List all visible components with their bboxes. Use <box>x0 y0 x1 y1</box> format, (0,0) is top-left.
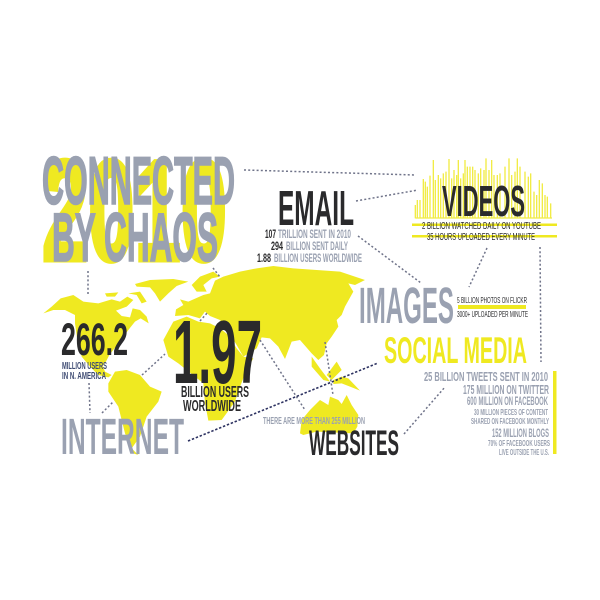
social media side bar <box>553 371 556 454</box>
worldwide caption <box>181 384 249 415</box>
social media stats: LIVE OUTSIDE THE U.S. <box>499 447 549 457</box>
email stats <box>257 229 362 265</box>
email stats: BILLION SENT DAILY <box>286 241 348 253</box>
Eurasia <box>175 266 365 360</box>
navy connector line <box>188 363 378 441</box>
title <box>42 143 235 276</box>
north america number: 266.2 <box>61 314 128 365</box>
dotted connector lines <box>88 170 541 434</box>
email stats: BILLION USERS WORLDWIDE <box>274 253 362 265</box>
yellow rule two <box>412 235 557 238</box>
images rule <box>458 305 526 309</box>
websites caption: THERE ARE MORE THAN 255 MILLION <box>263 416 365 427</box>
Arctic islands <box>105 292 147 303</box>
yellow rule one <box>412 224 557 226</box>
worldwide caption: BILLION USERS <box>181 384 249 401</box>
worldwide caption: WORLDWIDE <box>183 398 241 415</box>
Scandinavia <box>192 272 220 292</box>
text: INTERNET <box>61 408 184 465</box>
text: IMAGES <box>359 277 454 334</box>
north america caption <box>62 360 107 382</box>
text: WEBSITES <box>309 424 399 463</box>
title: BY CHAOS <box>52 199 218 276</box>
worldwide number: 1.97 <box>173 303 262 403</box>
Sumatra <box>312 357 330 382</box>
Africa <box>163 317 253 421</box>
images stat one: 5 BILLION PHOTOS ON FLICKR <box>457 295 527 305</box>
South America <box>108 370 162 455</box>
email stats: 1.88 <box>257 253 271 265</box>
yellow year 2010 behind title: 2010 <box>42 132 227 291</box>
videos stats <box>422 221 541 243</box>
Australia <box>300 395 358 435</box>
north america caption: IN N. AMERICA <box>62 370 106 382</box>
text: CONNECTED <box>42 143 235 219</box>
email stats: TRILLION SENT IN 2010 <box>278 229 351 241</box>
Greenland <box>135 279 188 302</box>
images stat two: 3000+ UPLOADED PER MINUTE <box>457 309 528 319</box>
email stats: 107 <box>265 229 276 241</box>
email stats: 294 <box>271 241 283 253</box>
video bars <box>415 158 552 218</box>
north america caption: MILLION USERS <box>62 360 107 372</box>
text: EMAIL <box>278 182 354 236</box>
Indonesian archipelago <box>333 377 360 391</box>
social media stats <box>424 369 550 457</box>
North America <box>43 295 149 377</box>
world map <box>43 266 365 455</box>
Borneo <box>327 362 342 380</box>
social media stats: 70% OF FACEBOOK USERS <box>488 438 550 448</box>
